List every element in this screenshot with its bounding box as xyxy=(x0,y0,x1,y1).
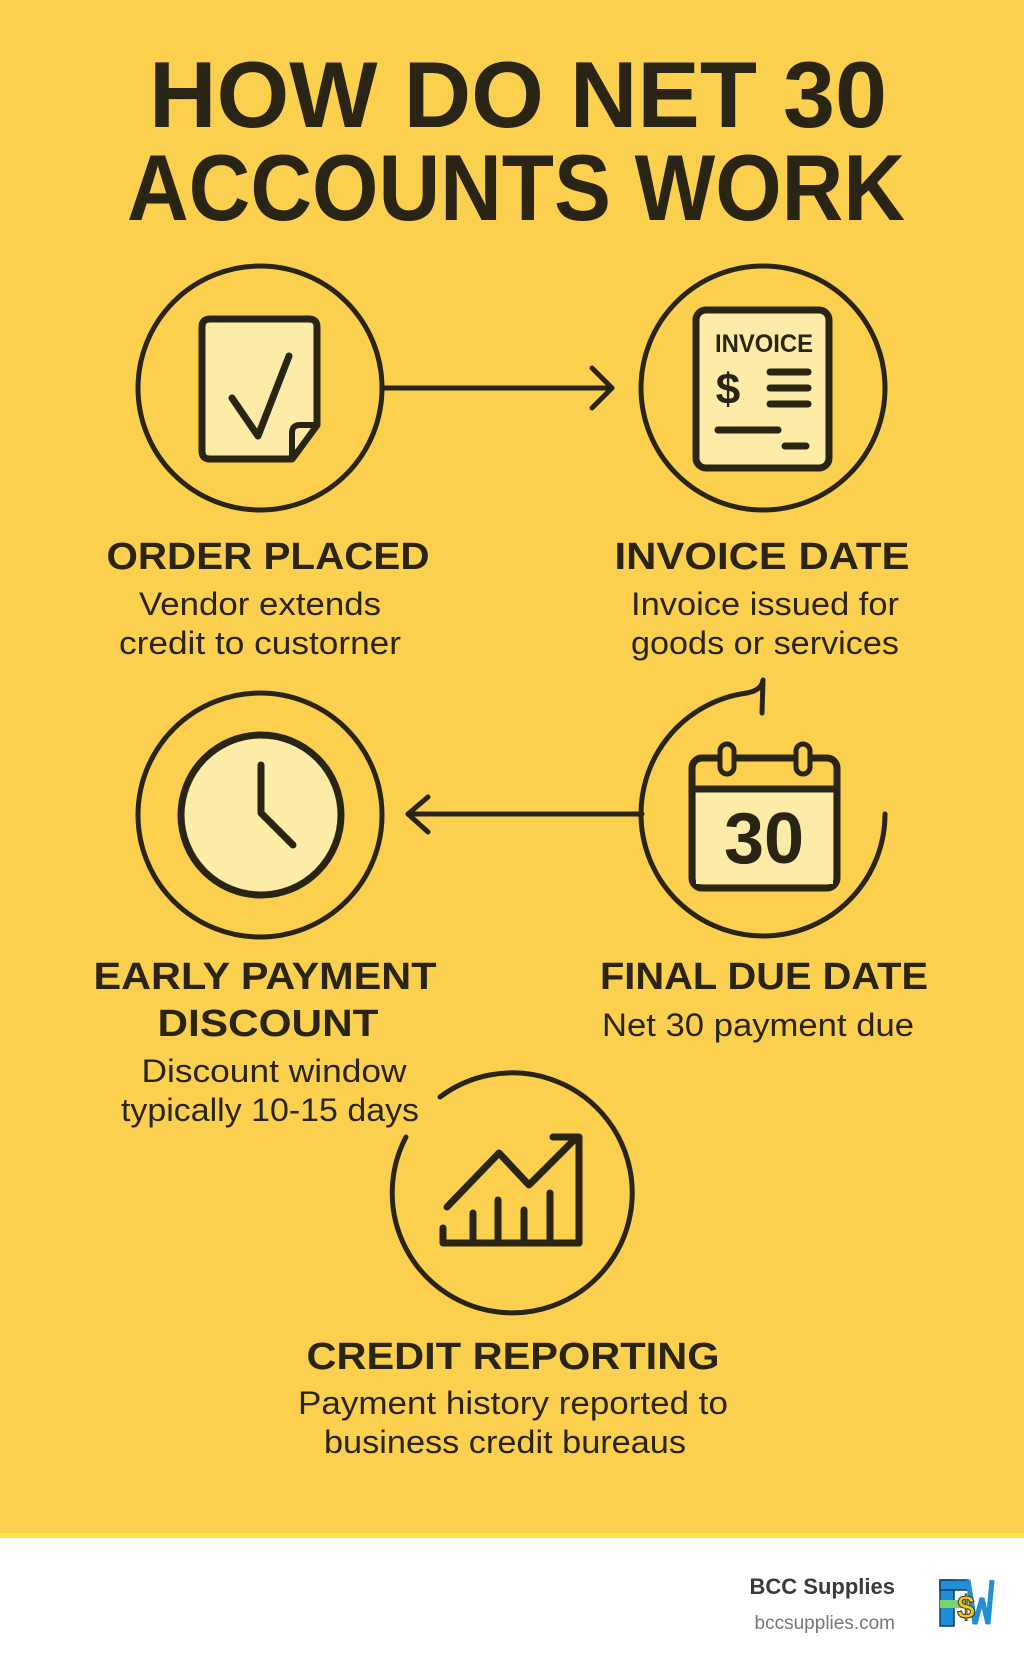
footer brand: bccsupplies.com xyxy=(755,1613,895,1634)
icon: document with checkmark xyxy=(138,266,382,510)
text: early payment description: Discount window xyxy=(142,1053,407,1089)
text: early payment description: typically 10-15 days xyxy=(121,1092,419,1128)
heading: early payment discount xyxy=(94,956,436,1045)
arrow: due date to early discount xyxy=(408,797,642,832)
text: invoice date description: goods or services xyxy=(631,625,899,661)
heading: early payment discount: DISCOUNT xyxy=(158,1003,378,1045)
icon: invoice: INVOICE xyxy=(715,330,813,358)
arrow: order to invoice xyxy=(382,368,612,408)
title xyxy=(127,42,905,240)
text: invoice date description: Invoice issued for xyxy=(631,586,899,622)
text: credit reporting description: business credit bureaus xyxy=(324,1424,686,1460)
icon: growth chart xyxy=(392,1073,632,1313)
title: ACCOUNTS WORK xyxy=(127,135,905,240)
step: credit reporting xyxy=(298,1073,728,1460)
heading: final due date: FINAL DUE DATE xyxy=(600,956,928,998)
step: final due date xyxy=(600,680,928,1043)
icon: calendar with circular arrow xyxy=(641,680,885,936)
text: invoice date description xyxy=(631,586,899,661)
step: invoice date xyxy=(614,266,910,661)
text: credit reporting description: Payment history reported to xyxy=(298,1385,728,1421)
text: order placed description: Vendor extends xyxy=(139,586,381,622)
text: final due date description: Net 30 payment due xyxy=(602,1007,914,1043)
footer brand: BCC Supplies xyxy=(750,1574,895,1599)
icon: calendar with circular arrow: 30 xyxy=(724,799,804,879)
icon: invoice xyxy=(641,266,885,510)
text: credit reporting description xyxy=(298,1385,728,1460)
icon: invoice: $ xyxy=(716,365,740,414)
icon: logo: $ xyxy=(957,1589,975,1625)
heading: order placed: ORDER PLACED xyxy=(106,536,430,578)
icon: logo xyxy=(940,1580,992,1626)
footer brand xyxy=(750,1574,992,1634)
heading: credit reporting: CREDIT REPORTING xyxy=(306,1336,720,1378)
title: HOW DO NET 30 xyxy=(149,42,887,147)
step: order placed xyxy=(106,266,430,661)
text: order placed description: credit to custorner xyxy=(119,625,401,661)
heading: invoice date: INVOICE DATE xyxy=(614,536,910,578)
heading: early payment discount: EARLY PAYMENT xyxy=(94,956,436,998)
step: early payment discount xyxy=(94,693,436,1128)
icon: clock xyxy=(138,693,382,937)
text: order placed description xyxy=(119,586,401,661)
text: early payment description xyxy=(121,1053,419,1128)
